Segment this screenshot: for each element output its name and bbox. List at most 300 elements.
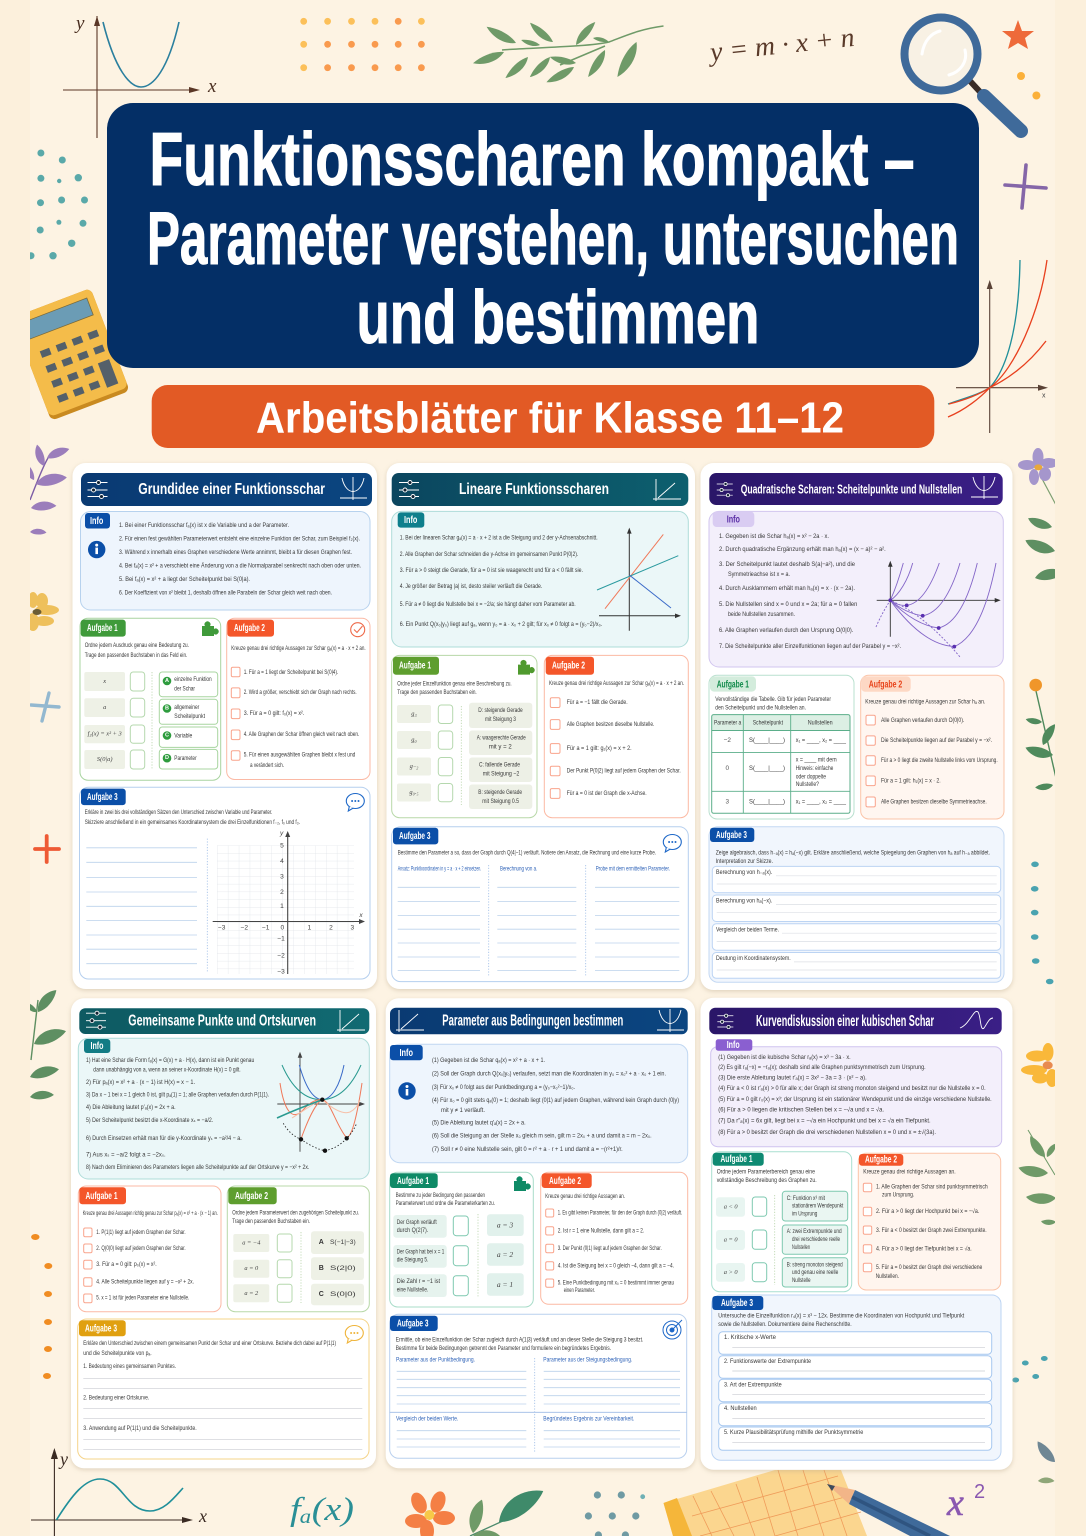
table: oder doppelte [796, 773, 826, 780]
task 1: matching: Bestimme zu jeder Bedingung den passenden [396, 1192, 485, 1199]
task 3: numbered answer rows [712, 1295, 1001, 1460]
info panel: (3) Für x₀ ≠ 0 folgt aus der Punktbedingung a = (y₀−x₀²−1)/x₀. [432, 1084, 575, 1091]
task 2: matching: S(2|0) [330, 1265, 356, 1272]
decorative gray-blue and olive leaves right [1038, 1441, 1055, 1484]
info panel: 5. Für a ≠ 0 liegt die Nullstelle bei x = −2/a; sie hängt daher vom Parameter ab. [400, 601, 576, 608]
info panel: 7) Aus xₛ = −a/2 folgt a = −2xₛ. [86, 1152, 166, 1158]
task 3: four-part worksheet [390, 1314, 687, 1458]
task 1: matching: D: steigende Gerade [478, 707, 523, 714]
task 2: matching: Ordne jedem Parameterwert den zugehörigen Scheitelpunkt zu. [232, 1210, 359, 1216]
task 3: explanation with coordinate grid: Skizziere anschließend in ein gemeinsames Koordinatensystem die drei Einzelfunktionen f₋₂, f₀ und f₃. [85, 819, 300, 826]
task 3: numbered answer rows: 4. Nullstellen [724, 1405, 757, 1412]
info panel: 3. Für a > 0 steigt die Gerade, für a = 0 ist sie waagerecht und für a < 0 fällt sie. [400, 567, 583, 574]
task 2: statements: Aufgabe 2 [234, 622, 265, 634]
task 1: matching: B: streng monoton steigend [787, 1262, 843, 1268]
task 3: stacked answer rows: Berechnung von h₋ₐ(x). [716, 869, 773, 876]
info panel [709, 511, 1003, 667]
task 2: statements: 1. Es gibt keinen Parameter, für den der Graph durch (0|2) verläuft. [558, 1210, 683, 1216]
task 1: matching: mit Steigung 3 [485, 716, 516, 723]
header [79, 1008, 369, 1034]
task 1: matching: Die Zahl r = −1 ist [397, 1278, 440, 1285]
task 1: statements: 5. x = 1 ist für jeden Parameter eine Nullstelle. [96, 1294, 190, 1302]
info panel: 1. Bei einer Funktionsschar fₐ(x) ist x die Variable und a der Parameter. [119, 522, 289, 529]
task 3: stacked answer rows: Vergleich der beiden Terme. [716, 926, 779, 934]
info panel: (1) Gegeben ist die kubische Schar rₐ(x) = x³ − 3a · x. [718, 1054, 851, 1061]
info panel: (6) Soll die Steigung an der Stelle x₀ gleich m sein, gilt m = 2x₀ + a und damit a = m − 2x₀. [432, 1132, 652, 1140]
table: −2 [724, 737, 731, 744]
coordinate grid: 3 [280, 874, 284, 881]
task 1: matching: einzelne Funktion [174, 676, 212, 683]
task 1: matching: Aufgabe 1 [399, 660, 431, 672]
task 3: written answers: Erkläre den Unterschied zwischen einem gemeinsamen Punkt der Schar und einer Ortskurve. Beziehe dich dabei auf P(1|1) [83, 1340, 336, 1347]
task 1: matching: a = 0 [724, 1236, 738, 1244]
task 1: matching: die Steigung 5. [397, 1256, 429, 1264]
task 2: statements: 3. Für a < 0 besitzt der Graph zwei Extrempunkte. [876, 1227, 987, 1234]
task 1: matching: Ordne jeder Einzelfunktion genau eine Beschreibung zu. [397, 680, 512, 687]
table: Hinweis: einfache [796, 765, 834, 772]
info panel: (7) Da r″ₐ(x) = 6x gilt, liegt bei x = −√a ein Hochpunkt und bei x = √a ein Tiefpunkt. [718, 1118, 931, 1124]
info panel: Info [400, 1047, 413, 1059]
locus graph [277, 1052, 365, 1153]
icon: target [663, 1320, 682, 1339]
task 2: statements [861, 675, 1004, 819]
info panel: 6. Ein Punkt Q(x₀|y₀) liegt auf gₐ, wenn y₀ = a · x₀ + 2 gilt; für x₀ ≠ 0 folgt a = (y₀−2)/x₀. [400, 621, 603, 628]
task 3: written answers: 1. Bedeutung eines gemeinsamen Punktes. [83, 1363, 176, 1370]
task 3: numbered answer rows: 5. Kurze Plausibilitätsprüfung mithilfe der Punktsymmetrie [724, 1429, 864, 1436]
task 3: written answers: Aufgabe 3 [85, 1322, 117, 1334]
info panel: (6) Für a > 0 liegen die kritischen Stellen bei x = −√a und x = √a. [718, 1106, 884, 1114]
header [390, 1008, 688, 1034]
task 2: statements: Kreuze genau drei richtige Aussagen an. [863, 1168, 956, 1176]
header [392, 473, 688, 506]
task 1: matching: C: Funktion x³ mit [787, 1195, 825, 1202]
task 1: table: Vervollständige die Tabelle. Gib für jeden Parameter [715, 696, 831, 703]
task 1: matching [712, 1152, 852, 1292]
task 1: matching: Nullstelle [792, 1277, 811, 1284]
task 3: stacked answer rows: Zeige algebraisch, dass h₋ₐ(x) = hₐ(−x) gilt. Erkläre anschließend, welche Spiegelung den Graphen von hₐ auf h₋ₐ abbildet. [716, 849, 990, 856]
task 1: matching: Parameter [174, 755, 197, 762]
table: S(____|____) [749, 765, 785, 772]
info panel: (5) Die Ableitung lautet q′ₐ(x) = 2x + a. [432, 1120, 526, 1126]
info panel: 7. Die Scheitelpunkte aller Einzelfunktionen liegen auf der Parabel y = −x². [719, 643, 901, 650]
task 2: matching: a = 2 [244, 1290, 259, 1297]
task 1: statements: 2. Q(0|0) liegt auf jedem Graphen der Schar. [96, 1245, 186, 1252]
task 1: table: Aufgabe 1 [717, 678, 749, 690]
task 2: statements: 2. Für a > 0 liegt der Hochpunkt bei x = −√a. [876, 1208, 980, 1215]
table: Scheitelpunkt [753, 720, 783, 726]
info panel: Symmetrieachse ist x = a. [728, 571, 790, 578]
coordinate grid: 3 [350, 925, 354, 932]
icon: magnifying glass [904, 18, 1021, 131]
info panel: 5) Der Scheitelpunkt besitzt die x-Koordinate xₛ = −a/2. [86, 1117, 214, 1124]
graph: sine-like curve bottom left: x [198, 1506, 207, 1526]
task 1: matching: Variable [174, 733, 193, 740]
task 1: matching: x [102, 678, 106, 685]
info panel: mit y ≠ 1 verläuft. [441, 1107, 485, 1114]
info panel: 2. Durch quadratische Ergänzung erhält man hₐ(x) = (x − a)² − a². [719, 546, 886, 553]
task 2: matching [227, 1186, 369, 1312]
card: Quadratische Scharen [700, 463, 1012, 990]
decorative gray-teal dots bottom [585, 1491, 645, 1536]
decorative teal dots left [28, 150, 88, 259]
task 3: three columns: Ansatz: Punktkoordinaten in y = a · x + 2 einsetzen. [398, 866, 481, 872]
task 1: matching: durch Q(2|7). [397, 1227, 429, 1234]
line graph [597, 528, 681, 631]
task 3: numbered answer rows: sowie die Nullstellen. Dokumentiere deine Rechenschritte. [718, 1321, 852, 1328]
task 3: stacked answer rows: Interpretation zur Skizze. [716, 858, 773, 865]
task 3: four-part worksheet: Vergleich der beiden Werte. [396, 1417, 459, 1423]
task 3: written answers [78, 1319, 369, 1459]
info panel: (2) Es gilt rₐ(−x) = −rₐ(x); deshalb sind alle Graphen punktsymmetrisch zum Ursprung. [718, 1064, 926, 1071]
task 3: four-part worksheet: Parameter aus der Punktbedingung. [396, 1357, 475, 1363]
task 1: matching: Ordne jedem Ausdruck genau eine Bedeutung zu. [85, 642, 189, 649]
task 2: statements: Kreuze genau drei richtige Aussagen zur Schar gₐ(x) = a · x + 2 an. [231, 645, 366, 652]
header: Parameter aus Bedingungen bestimmen [442, 1012, 623, 1030]
task 2: statements: 1. Für a = 1 liegt der Scheitelpunkt bei S(0|4). [244, 669, 339, 676]
graph: exponential curves right: x [1042, 392, 1046, 400]
formula: y = m x + n: y = m · x + n [705, 22, 856, 67]
task 3: stacked answer rows: Berechnung von hₐ(−x). [716, 898, 773, 905]
task 3: three columns: Berechnung von a. [500, 866, 538, 872]
info panel: (1) Gegeben ist die Schar qₐ(x) = x² + a · x + 1. [432, 1057, 545, 1064]
parabola family graph [876, 561, 1001, 658]
task 3: four-part worksheet: Begründetes Ergebnis zur Vereinbarkeit. [543, 1417, 635, 1423]
task 1: matching: Aufgabe 1 [720, 1153, 753, 1165]
task 1: matching: Trage den passenden Buchstaben ein. [397, 689, 477, 696]
info panel: beide Nullstellen zusammen. [728, 611, 795, 618]
decorative purple flower right [1018, 448, 1055, 580]
task 1: matching: C [165, 732, 169, 738]
info panel: 5. Bei fₐ(x) = x² + a liegt der Scheitelpunkt bei S(0|a). [119, 576, 250, 583]
task 1: matching [392, 655, 537, 818]
task 1: matching: g₀ [411, 736, 417, 744]
info panel: 6. Der Koeffizient von x² bleibt 1, deshalb öffnen alle Parabeln der Schar gleich weit nach oben. [119, 590, 332, 597]
task 1: matching: stationärem Wendepunkt [792, 1202, 844, 1210]
task 2: statements: Aufgabe 2 [549, 1175, 581, 1187]
task 1: statements: Kreuze genau drei Aussagen richtig genau zur Schar pₐ(x) = x² + a · (x − 1) an. [83, 1210, 218, 1217]
graph: sine-like curve bottom left [31, 1448, 207, 1536]
task 3: explanation with coordinate grid: Erkläre in zwei bis drei vollständigen Sätzen den Unterschied zwischen Variable und Parameter. [85, 809, 273, 816]
task 2: statements: 5. Für a = 0 besitzt der Graph drei verschiedene [876, 1264, 983, 1271]
task 2: matching: a = −4 [242, 1240, 261, 1246]
task 2: matching: B [319, 1265, 324, 1272]
coordinate grid: x [358, 912, 363, 919]
info panel: dann unabhängig von a, wenn an seiner x-Koordinate H(x) = 0 gilt. [93, 1066, 241, 1074]
info panel: (7) Soll r ≠ 0 eine Nullstelle sein, gilt 0 = r² + a · r + 1 und damit a = −(r²+1)/r. [432, 1146, 623, 1153]
decorative teal dots right [1012, 862, 1053, 1382]
decorative star and dots [1002, 20, 1040, 100]
task 1: matching: Ordne jedem Parameterbereich genau eine [717, 1168, 816, 1176]
task 1: matching: f₃(x) = x² + 3 [88, 730, 122, 738]
task 3: explanation with coordinate grid: Aufgabe 3 [87, 791, 118, 803]
task 1: matching: vollständige Beschreibung des Graphen zu. [717, 1177, 817, 1184]
coordinate grid: −3 [277, 968, 285, 975]
decorative red plus left [35, 836, 59, 862]
info panel: (4) Für x₀ = 0 gilt stets qₐ(0) = 1; deshalb liegt (0|1) auf jedem Graphen, während kein Graph durch (0|y) [432, 1097, 679, 1104]
icon: calculator [30, 290, 128, 420]
task 3: numbered answer rows: 3. Art der Extrempunkte [724, 1382, 782, 1388]
graph: parabola top left: y [74, 13, 85, 34]
graph: parabola top left [63, 13, 217, 138]
info panel: (4) Für a < 0 ist r′ₐ(x) > 0 für alle x; der Graph ist streng monoton steigend und besitzt nur die Nullstelle x = 0. [718, 1085, 986, 1092]
task 2: statements: Die Scheitelpunkte liegen auf der Parabel y = −x². [881, 737, 992, 744]
graph: sine-like curve bottom left: y [58, 1449, 68, 1469]
task 3: numbered answer rows: 2. Funktionswerte der Extrempunkte [724, 1358, 812, 1365]
task 2: matching: S(−1|−3) [330, 1239, 356, 1246]
task 1: matching: mit y = 2 [489, 744, 512, 750]
task 1: statements: 1. P(1|1) liegt auf jedem Graphen der Schar. [96, 1229, 186, 1236]
info panel: Info [727, 1039, 740, 1051]
info panel: 4. Durch Ausklammern erhält man hₐ(x) = x · (x − 2a). [719, 585, 855, 592]
task 1: matching: eine Nullstelle. [397, 1286, 429, 1294]
task 2: statements: 4. Für a > 0 liegt der Tiefpunkt bei x = √a. [876, 1246, 972, 1252]
task 2: statements: 4. Ist die Steigung bei x = 0 gleich −4, dann gilt a = −4. [558, 1262, 674, 1270]
table: S(____|____) [749, 737, 785, 744]
task 3: written answers: 3. Anwendung auf P(1|1) und die Scheitelpunkte. [83, 1425, 197, 1432]
task 2: statements [541, 1172, 688, 1304]
info panel: Info [90, 515, 103, 527]
task 2: matching: C [319, 1291, 324, 1298]
task 1: matching: a > 0 [724, 1269, 738, 1276]
task 2: statements [858, 1153, 1001, 1290]
task 1: matching: Scheitelpunkt [174, 713, 205, 720]
task 2: statements: 5. Eine Punktbedingung mit x₀ = 0 bestimmt immer genau [558, 1280, 674, 1286]
task 1: matching: S(0|a) [97, 756, 113, 763]
task 3: stacked answer rows [709, 827, 1004, 982]
decorative pencil [827, 1484, 950, 1536]
info panel: 4) Die Ableitung lautet p′ₐ(x) = 2x + a. [86, 1104, 176, 1111]
task 1: matching: D [165, 755, 169, 761]
info panel: 1) Hat eine Schar die Form fₐ(x) = G(x) + a · H(x), dann ist ein Punkt genau [86, 1057, 254, 1064]
decorative leaf branch top [473, 22, 664, 82]
coordinate grid: 4 [280, 858, 284, 865]
info panel: 3. Der Scheitelpunkt lautet deshalb S(a|−a²), und die [719, 561, 856, 568]
task 2: statements: 3. Für a = 0 gilt: f₀(x) = x². [244, 710, 305, 717]
info panel: 4. Je größer der Betrag |a| ist, desto steiler verläuft die Gerade. [400, 583, 543, 590]
graph: parabola top left: x [207, 76, 217, 97]
task 3: stacked answer rows: Aufgabe 3 [716, 829, 747, 841]
decorative orange flower bottom [405, 1489, 455, 1536]
info panel [80, 512, 370, 610]
info panel: (5) Für a = 0 gilt r₀(x) = x³; der Ursprung ist ein stationärer Wendepunkt und die einzige verschiedene Nullstelle. [718, 1096, 992, 1103]
info panel: 4. Bei fₐ(x) = x² + a verschiebt eine Änderung von a die Normalparabel senkrecht nach oben oder unten. [119, 562, 361, 569]
task 1: statements: 3. Für a = 0 gilt: p₀(x) = x². [96, 1261, 157, 1268]
task 1: matching: der Schar [174, 685, 195, 692]
decorative blue plus left [31, 693, 59, 721]
task 2: matching: a = 0 [244, 1265, 259, 1272]
task 3: three columns [392, 827, 688, 982]
task 1: matching: a = 3 [497, 1220, 513, 1230]
task 1: matching: Parameterwert und ordne die Parameterkarten zu. [396, 1200, 495, 1207]
card: Lineare Funktionsscharen [386, 463, 695, 989]
table [712, 715, 850, 813]
task 1: statements: 4. Alle Scheitelpunkte liegen auf y = −x² + 2x. [96, 1278, 194, 1286]
graph: exponential curves right [948, 260, 1048, 433]
header [709, 473, 1003, 505]
coordinate grid: 5 [280, 842, 284, 850]
coordinate grid [213, 830, 365, 975]
table: x = ____ mit dem [796, 757, 837, 764]
task 3: four-part worksheet: Bestimme für beide Bedingungen getrennt den Parameter und formuliere ein begründetes Ergebnis. [396, 1345, 611, 1352]
task 1: matching: g₀.₅ [409, 789, 419, 796]
task 1: statements [78, 1186, 221, 1312]
task 1: matching: B: steigende Gerade [478, 789, 522, 796]
header [709, 1008, 1002, 1034]
task 1: matching: Nullstellen [792, 1244, 810, 1251]
coordinate grid: −1 [277, 936, 285, 942]
info panel: 2. Für einen fest gewählten Parameterwert entsteht eine einzelne Funktion der Schar, zum Beispiel f₂(x). [119, 536, 360, 542]
coordinate grid: 2 [280, 889, 284, 896]
decorative grid paper [664, 1470, 867, 1536]
info panel: (3) Die erste Ableitung lautet r′ₐ(x) = 3x² − 3a = 3 · (x² − a). [718, 1074, 867, 1082]
table: S(____|____) [749, 798, 785, 805]
task 2: statements: Für a = 1 gilt: h₁(x) = x · 2. [881, 778, 941, 784]
task 2: statements: Aufgabe 2 [869, 678, 902, 690]
task 2: statements: Alle Graphen besitzen dieselbe Nullstelle. [567, 721, 655, 728]
table: Parameter a [714, 720, 742, 726]
task 2: statements: Aufgabe 2 [552, 660, 585, 672]
table: x₁ = ____, x₂ = ____ [796, 798, 847, 805]
task 2: statements [227, 618, 370, 780]
task 2: statements: Kreuze genau drei richtige Aussagen an. [545, 1193, 625, 1200]
task 2: matching: S(0|0) [330, 1291, 356, 1298]
table: x₁ = ____, x₂ = ____ [796, 737, 847, 744]
task 2: statements: 3. Der Punkt (0|1) liegt auf jedem Graphen der Schar. [558, 1245, 662, 1252]
task 1: matching: allgemeiner [174, 704, 199, 711]
decorative yellow flower right [1018, 1043, 1055, 1225]
task 2: statements: einen Parameter. [564, 1287, 595, 1294]
header [81, 473, 372, 506]
formula: x squared: x [946, 1482, 964, 1524]
task 1: matching: mit Steigung −2 [483, 770, 520, 778]
task 1: matching: A: waagerechte Gerade [477, 734, 526, 741]
task 1: matching: a = 2 [497, 1250, 513, 1259]
task 1: matching: und genau eine reelle [792, 1269, 839, 1276]
task 2: statements: Nullstellen. [876, 1273, 899, 1280]
info panel: 2) Für pₐ(x) = x² + a · (x − 1) ist H(x) = x − 1. [86, 1079, 195, 1086]
info panel: Info [404, 514, 417, 526]
decorative orange bud branch right [1026, 678, 1055, 790]
table: 0 [726, 765, 730, 772]
formula: f_a(x): fₐ(x) [290, 1492, 354, 1528]
task 2: statements: 4. Alle Graphen der Schar öffnen gleich weit nach oben. [244, 731, 360, 738]
task 1: table: den Scheitelpunkt und die Nullstellen an. [715, 705, 806, 712]
task 3: written answers: und die Scheitelpunkte von pₐ. [83, 1350, 152, 1357]
info panel: (8) Für a > 0 besitzt der Graph die drei verschiedenen Nullstellen x = 0 und x = ±√(3a). [718, 1129, 936, 1136]
title line 3: und bestimmen [356, 275, 760, 359]
info panel: Info [727, 514, 740, 526]
task 1: matching: g₃ [411, 710, 417, 718]
task 2: statements: Aufgabe 2 [865, 1154, 897, 1166]
task 1: matching: mit Steigung 0.5 [482, 798, 520, 805]
header: Lineare Funktionsscharen [459, 481, 609, 498]
info panel: 6) Durch Einsetzen erhält man für die y-Koordinate yₛ = −a²/4 − a. [86, 1135, 242, 1142]
task 2: statements: 2. Ist r = 1 eine Nullstelle, dann gilt a = 2. [558, 1228, 645, 1234]
card: Gemeinsame Punkte und Ortskurven [71, 998, 376, 1468]
info panel: 5. Die Nullstellen sind x = 0 und x = 2a; für a = 0 fallen [719, 601, 857, 608]
task 1: matching: Aufgabe 1 [397, 1175, 429, 1187]
coordinate grid: 0 [280, 925, 284, 932]
table: 3 [726, 798, 730, 805]
task 1: statements: Aufgabe 1 [86, 1190, 118, 1202]
subtitle banner: Arbeitsblätter für Klasse 11–12 [256, 394, 844, 442]
decorative green branch left [30, 990, 66, 1100]
task 3: four-part worksheet: Ermittle, ob eine Einzelfunktion der Schar zugleich durch A(1|3) verläuft und an dieser Stelle die Steigung 3 besitzt. [396, 1336, 644, 1344]
task 1: matching: C: fallende Gerade [479, 762, 520, 768]
decorative purple plus [1005, 165, 1046, 208]
task 1: matching: A [165, 678, 169, 684]
task 1: matching: drei verschiedene reelle [792, 1236, 840, 1243]
info panel: 6. Alle Graphen verlaufen durch den Ursprung O(0|0). [719, 627, 854, 634]
task 1: matching: Der Graph hat bei x = 1 [397, 1248, 445, 1256]
decorative purple branch left [30, 444, 70, 534]
task 3: three columns: Probe mit dem ermittelten Parameter. [596, 866, 670, 872]
info panel: 3. Während x innerhalb eines Graphen verschiedene Werte annimmt, bleibt a für diesen Graphen fest. [119, 549, 352, 556]
coordinate grid: −2 [277, 952, 285, 960]
info panel: 1. Bei der linearen Schar gₐ(x) = a · x + 2 ist a die Steigung und 2 der y-Achsenabschnitt. [400, 534, 598, 542]
coordinate grid: 2 [329, 925, 333, 932]
info panel [78, 1038, 369, 1179]
table: Nullstellen [808, 720, 833, 726]
info panel: 3) Da x − 1 bei x = 1 gleich 0 ist, gilt pₐ(1) = 1; alle Graphen verlaufen durch P(1|1). [86, 1092, 269, 1098]
task 1: matching: Der Graph verläuft [397, 1219, 437, 1226]
task 2: statements: Kreuze genau drei richtige Aussagen zur Schar gₐ(x) = a · x + 2 an. [549, 680, 684, 687]
task 3: four-part worksheet: Parameter aus der Steigungsbedingung. [543, 1357, 633, 1363]
info panel: 8) Nach dem Eliminieren des Parameters liegen alle Scheitelpunkte auf der Ortskurve y = −x² + 2x. [86, 1164, 310, 1171]
decorative orange dots [300, 18, 425, 71]
decorative yellow flower left [27, 592, 59, 631]
task 1: matching: a [103, 704, 106, 711]
task 1: table [709, 675, 854, 819]
task 1: matching: Aufgabe 1 [87, 622, 118, 634]
card: Parameter aus Bedingungen bestimmen [386, 998, 695, 1468]
coordinate grid: −1 [262, 925, 270, 932]
task 2: matching: A [319, 1239, 324, 1246]
task 3: numbered answer rows: Untersuche die Einzelfunktion r₄(x) = x³ − 12x. Bestimme die Koordinaten von Hochpunkt und Tiefpunkt [718, 1312, 965, 1320]
task 1: matching: A: zwei Extrempunkte und [787, 1228, 842, 1235]
info panel: 2. Alle Graphen der Schar schneiden die y-Achse im gemeinsamen Punkt P(0|2). [400, 551, 579, 558]
header: Kurvendiskussion einer kubischen Schar [756, 1013, 934, 1030]
info panel [711, 1039, 1002, 1147]
coordinate grid: −3 [218, 925, 226, 932]
task 2: statements: 2. Wird a größer, verschiebt sich der Graph nach rechts. [244, 689, 357, 696]
task 2: statements: 1. Alle Graphen der Schar sind punktsymmetrisch [876, 1184, 988, 1190]
task 1: matching: a = 1 [497, 1280, 513, 1289]
card: Grundidee einer Funktionsschar [72, 463, 377, 989]
task 2: statements: 5. Für einen ausgewählten Graphen bleibt x fest und [244, 752, 355, 758]
task 1: matching: a < 0 [724, 1204, 738, 1210]
coordinate grid: 1 [307, 925, 311, 932]
task 2: statements: Kreuze genau drei richtige Aussagen zur Schar hₐ an. [865, 698, 986, 706]
info panel [390, 1044, 688, 1163]
task 2: statements: Für a = −1 fällt die Gerade. [567, 699, 628, 706]
coordinate grid: −2 [241, 925, 248, 932]
task 3: numbered answer rows: 1. Kritische x-Werte [724, 1334, 777, 1341]
task 2: matching: Aufgabe 2 [235, 1190, 268, 1202]
task 3: three columns: Bestimme den Parameter a so, dass der Graph durch Q(4|−1) verläuft. Notiere den Ansatz, die Rechnung und eine kurze Probe. [398, 849, 656, 856]
task 3: three columns: Aufgabe 3 [399, 830, 431, 842]
decorative green branch bottom [469, 1490, 544, 1536]
coordinate grid: y [279, 830, 284, 837]
task 1: matching: im Ursprung [792, 1210, 817, 1218]
info panel: Info [90, 1040, 104, 1052]
task 2: statements: Für a = 1 gilt: g₁(x) = x + 2. [567, 745, 632, 752]
task 2: matching: Trage den passenden Buchstaben ein. [232, 1218, 310, 1225]
task 2: statements: a verändert sich. [250, 762, 284, 769]
formula: x squared: 2 [974, 1481, 985, 1503]
formula: x squared [946, 1484, 984, 1516]
card: Kurvendiskussion einer kubischen Schar [700, 998, 1012, 1470]
